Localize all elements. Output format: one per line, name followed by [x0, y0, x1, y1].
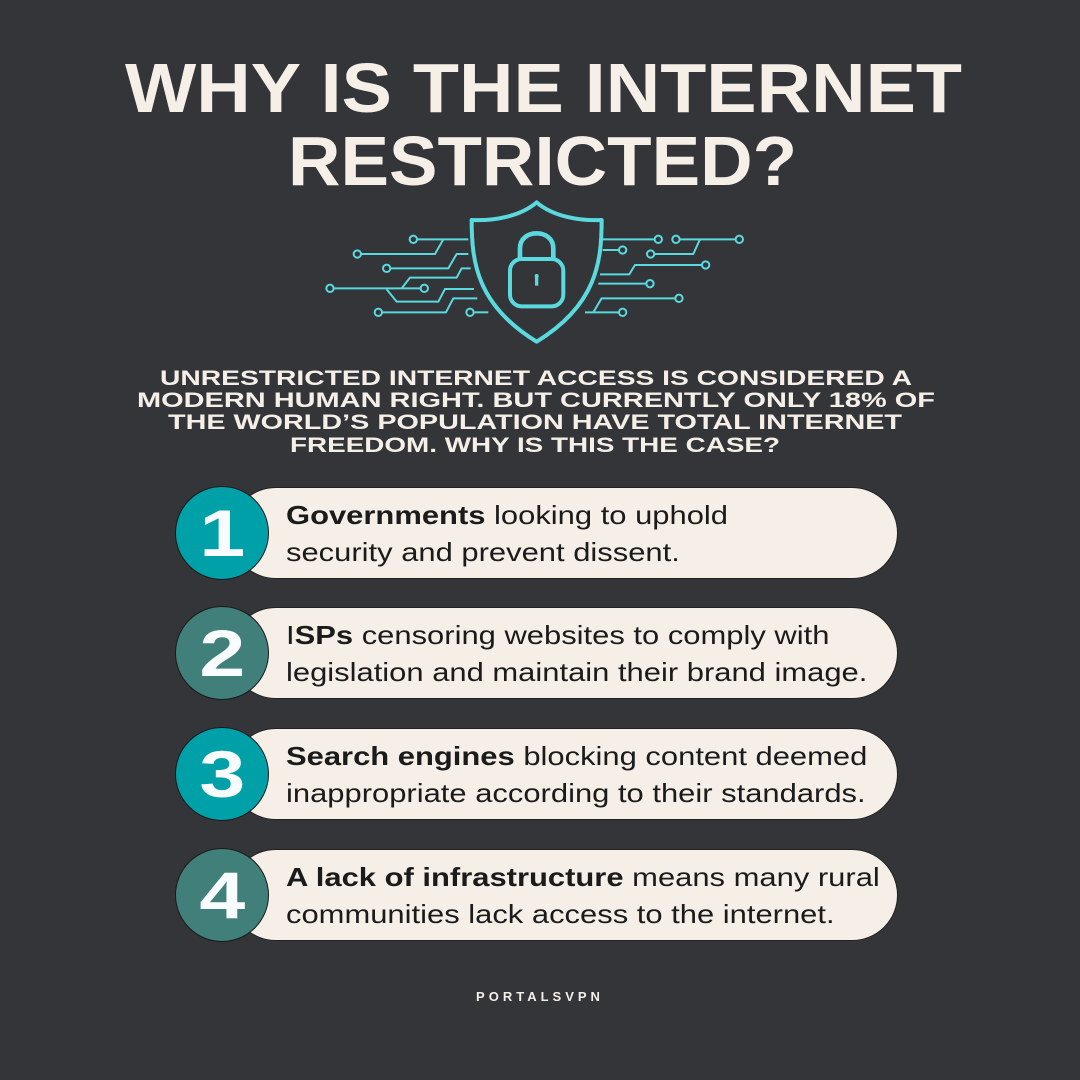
text: communities lack access to the internet. [286, 899, 835, 929]
title: WHY IS THE INTERNET [125, 49, 962, 127]
text: 1 [199, 496, 245, 570]
text: A lack of infrastructure means many rural [286, 862, 880, 892]
text: inappropriate according to their standards. [286, 778, 866, 808]
text: Governments looking to uphold [286, 500, 728, 530]
icon: shield with padlock and circuit lines [325, 200, 744, 344]
subtitle text: THE WORLD’S POPULATION HAVE TOTAL INTERNET [168, 411, 902, 434]
item 2 [175, 606, 898, 700]
footer brand: PORTALSVPN [476, 989, 604, 1004]
text: legislation and maintain their brand image. [286, 657, 867, 687]
text: 3 [199, 737, 245, 811]
title [125, 49, 962, 200]
item 3 [175, 727, 898, 821]
subtitle text [137, 367, 935, 457]
text: 4 [199, 858, 245, 932]
text: 2 [199, 616, 245, 690]
item 4 [175, 848, 898, 942]
subtitle text: FREEDOM. WHY IS THIS THE CASE? [290, 434, 780, 457]
text: ISPs censoring websites to comply with [286, 620, 829, 650]
text: security and prevent dissent. [286, 537, 680, 567]
subtitle text: UNRESTRICTED INTERNET ACCESS IS CONSIDERED A [160, 367, 912, 390]
subtitle text: MODERN HUMAN RIGHT. BUT CURRENTLY ONLY 18% OF [137, 389, 935, 412]
title: RESTRICTED? [288, 122, 797, 200]
text: Search engines blocking content deemed [286, 741, 867, 771]
item 1 [175, 486, 898, 580]
